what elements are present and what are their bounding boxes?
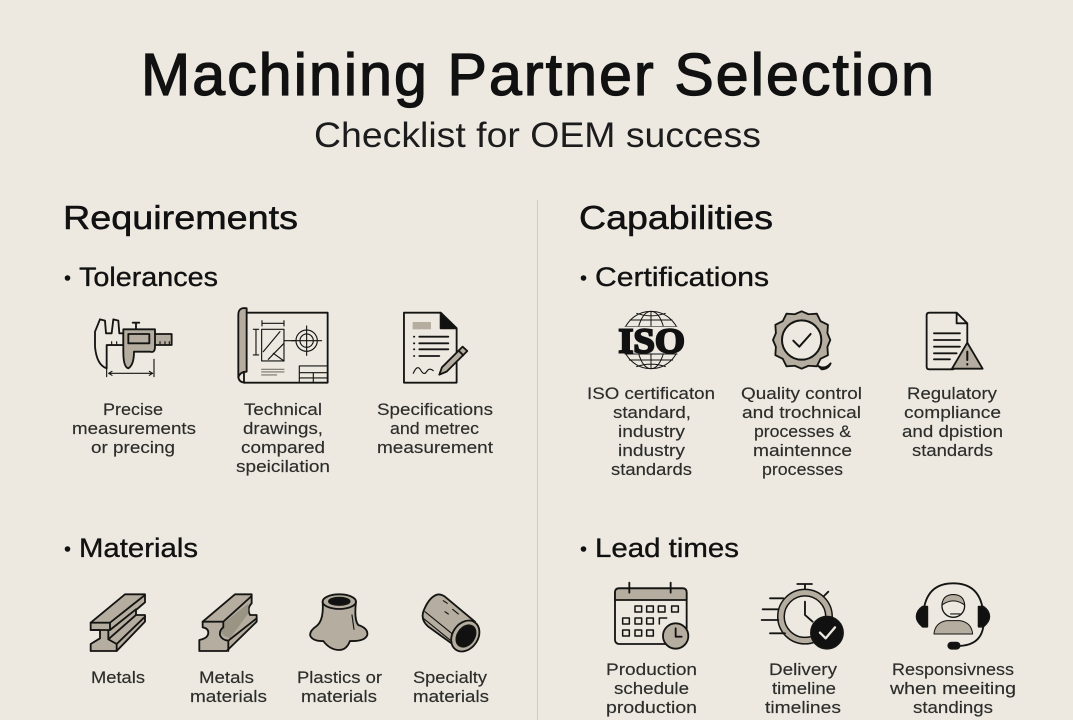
caption: delivery timeline: [765, 660, 841, 717]
caption: ISO certification: industry: [618, 422, 686, 441]
caption: ISO certification: standards: [611, 460, 692, 479]
icon: specialty tube: [423, 594, 485, 657]
subheading: lead times: Lead times: [595, 533, 739, 563]
icon: headset agent: [917, 583, 989, 649]
caption: metals materials: Metals: [199, 668, 254, 687]
caption: quality control: processes &: [754, 422, 852, 441]
caption: specifications: measurement: [377, 438, 493, 457]
caption: production schedule: [606, 660, 697, 717]
caption: regulatory compliance: [902, 384, 1003, 460]
caption: metals materials: [190, 668, 267, 706]
caption: precise measurements: [72, 400, 196, 457]
caption: quality control: Quality control: [741, 384, 862, 403]
caption: quality control: processes: [762, 460, 843, 479]
panel: capabilities: [579, 199, 1016, 717]
caption: plastics: [297, 668, 382, 706]
subtitle: Checklist for OEM success: [314, 116, 761, 155]
caption: technical drawings: Technical: [244, 400, 322, 419]
caption: specialty materials: [413, 668, 489, 706]
caption: specialty materials: Specialty: [413, 668, 488, 687]
icon: ISO globe: ISO: [618, 322, 685, 360]
caption: ISO certification: industry: [618, 441, 686, 460]
caption: responsiveness: [889, 660, 1016, 717]
caption: plastics: Plastics or: [297, 668, 382, 687]
icon: plastic part: [310, 594, 367, 650]
caption: regulatory compliance: Regulatory: [907, 384, 998, 403]
icon: specification document: [404, 313, 467, 383]
caption: ISO certification: standard,: [613, 403, 691, 422]
caption: precise measurements: Precise: [103, 400, 163, 419]
caption: specifications: and metrec: [390, 419, 480, 438]
caption: quality control: [741, 384, 862, 479]
caption: metals: Metals: [91, 668, 145, 687]
caption: production schedule: production: [606, 698, 697, 717]
caption: precise measurements: or precing: [91, 438, 175, 457]
icon: stopwatch: [762, 584, 843, 649]
caption: responsiveness: when meeiting: [889, 679, 1016, 698]
caption: technical drawings: drawings,: [243, 419, 323, 438]
caption: specifications: Specifications: [377, 400, 493, 419]
panel: requirements: [63, 199, 493, 706]
subheading: certifications: Certifications: [595, 262, 769, 292]
caption: delivery timeline: timeline: [772, 679, 836, 698]
caption: regulatory compliance: standards: [912, 441, 993, 460]
caption: regulatory compliance: compliance: [904, 403, 1001, 422]
heading: requirements: Requirements: [63, 199, 298, 236]
icon: caliper: [95, 319, 172, 377]
caption: regulatory compliance: and dpistion: [902, 422, 1003, 441]
caption: delivery timeline: timelines: [765, 698, 841, 717]
caption: specifications: [377, 400, 493, 457]
caption: quality control: and trochnical: [742, 403, 861, 422]
subheading: tolerances: Tolerances: [79, 262, 218, 292]
caption: responsiveness: Responsivness: [892, 660, 1014, 679]
caption: production schedule: schedule: [614, 679, 689, 698]
title: Machining Partner Selection: [141, 42, 934, 108]
caption: quality control: maintennce: [753, 441, 852, 460]
caption: metals materials: materials: [190, 687, 267, 706]
caption: ISO certification: [587, 384, 715, 479]
caption: technical drawings: compared: [241, 438, 325, 457]
caption: technical drawings: speicilation: [236, 457, 330, 476]
icon: regulatory document: [927, 313, 983, 369]
icon: quality seal: [773, 311, 831, 369]
icon: calendar: [615, 583, 688, 649]
icon: technical drawing: [238, 308, 328, 383]
caption: specialty materials: materials: [413, 687, 489, 706]
caption: production schedule: Production: [606, 660, 697, 679]
subheading: materials: Materials: [79, 533, 198, 563]
caption: ISO certification: ISO certificaton: [587, 384, 715, 403]
icon: I-beam: [91, 594, 145, 651]
caption: delivery timeline: Delivery: [769, 660, 838, 679]
icon: rail profile: [199, 594, 257, 651]
caption: precise measurements: measurements: [72, 419, 196, 438]
caption: responsiveness: standings: [913, 698, 993, 717]
heading: capabilities: Capabilities: [579, 199, 773, 236]
icon: ISO globe: [613, 311, 689, 369]
caption: plastics: materials: [301, 687, 377, 706]
caption: technical drawings: [236, 400, 330, 476]
